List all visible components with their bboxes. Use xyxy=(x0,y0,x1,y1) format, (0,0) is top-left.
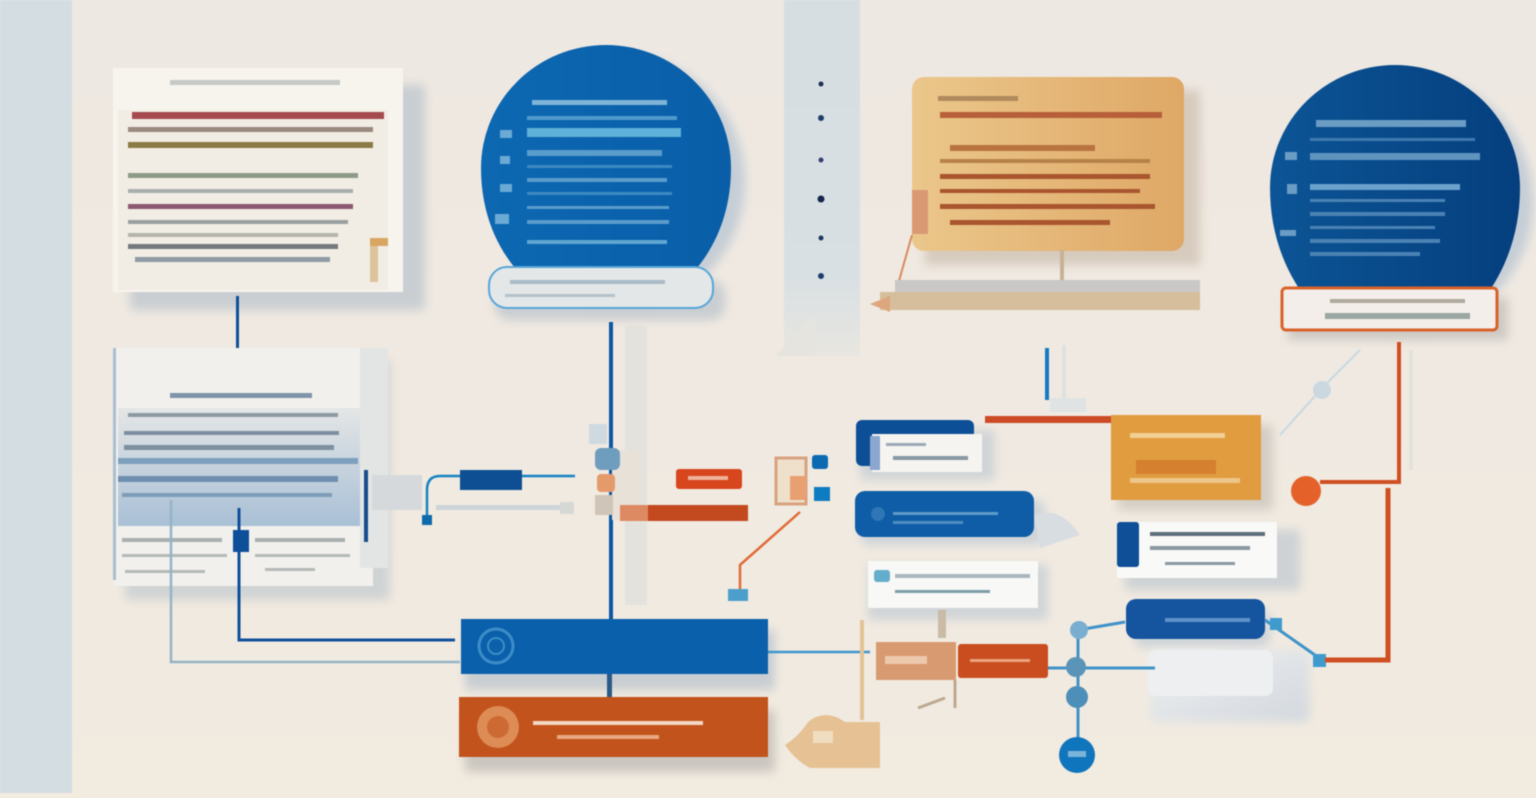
panel: middle-left document xyxy=(113,348,390,600)
grey card lower right xyxy=(1148,650,1310,722)
central vertical strip xyxy=(775,0,860,356)
panel: tan sign xyxy=(912,77,1200,265)
orange bar xyxy=(459,697,775,772)
panel: top-left document xyxy=(113,68,425,310)
red tags xyxy=(620,469,748,521)
box under dark circle xyxy=(1282,288,1508,340)
link from blue bar to right xyxy=(768,620,870,720)
blue bar xyxy=(461,619,775,698)
sign base and stem xyxy=(870,190,1200,312)
card: orange xyxy=(1111,415,1273,510)
card: white xyxy=(868,561,1048,638)
node network xyxy=(1048,618,1326,773)
red connector right xyxy=(1280,342,1411,660)
central vertical line xyxy=(609,322,647,620)
left side band xyxy=(0,0,72,793)
middle connector group with tag xyxy=(372,470,575,525)
panel: top-right dark circle xyxy=(1270,65,1533,330)
central nodes xyxy=(589,424,640,520)
card: blue pill right xyxy=(1126,599,1270,648)
card: blue pill xyxy=(855,491,1080,548)
red top connector xyxy=(985,345,1113,423)
panel: top blue circle xyxy=(481,45,745,310)
tan cloud shape xyxy=(785,715,880,768)
pill under blue circle xyxy=(489,267,725,320)
connector: document down xyxy=(230,296,246,378)
small node cluster xyxy=(728,455,830,601)
card: white right xyxy=(1117,522,1300,590)
connector lines from doc to blue bar xyxy=(171,500,460,662)
card: blue tab top xyxy=(856,420,995,480)
card: tan and red pair xyxy=(876,642,1048,708)
